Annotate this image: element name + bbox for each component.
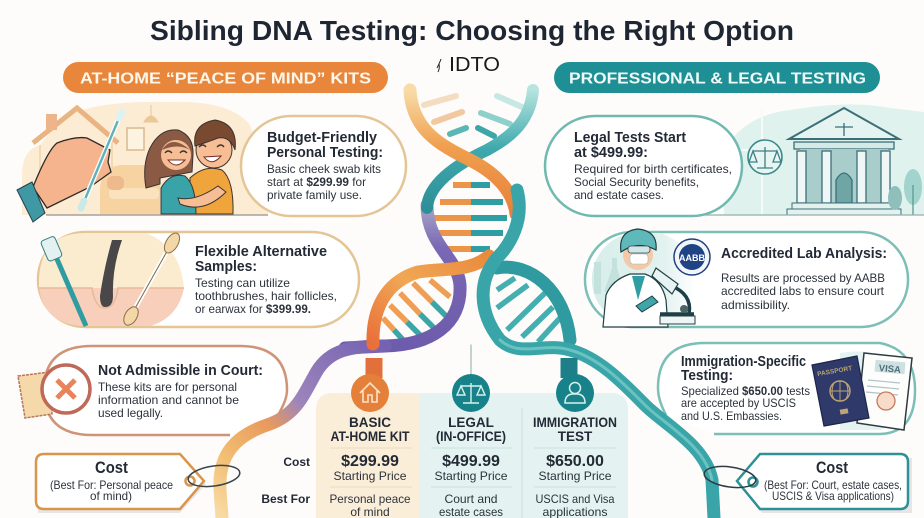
panel: accredited lab: accredited labs to ensure court xyxy=(721,284,885,298)
DNA helix xyxy=(220,90,714,518)
column: immigration xyxy=(533,374,617,518)
icon: AABB badge: AABB xyxy=(679,253,705,263)
column: immigration: Starting Price xyxy=(538,469,612,483)
panel: immigration: Specialized $650.00 tests xyxy=(681,384,810,398)
panel: flexible samples: Samples: xyxy=(195,258,257,275)
illustration: visa xyxy=(857,353,912,430)
panel: flexible samples: toothbrushes, hair follicles, xyxy=(195,289,337,303)
tag: cost right: USCIS & Visa applications) xyxy=(772,489,894,503)
column: immigration: $650.00 xyxy=(546,453,604,470)
panel: immigration: Immigration-Specific xyxy=(681,353,806,370)
heading: professional testing: PROFESSIONAL & LEGAL TESTING xyxy=(569,70,866,88)
tag: cost left: of mind) xyxy=(90,489,132,503)
floor xyxy=(46,214,268,216)
panel: legal tests: Social Security benefits, xyxy=(574,175,699,189)
sleeve xyxy=(17,182,45,222)
column: legal: Court and xyxy=(444,492,498,506)
panel: accredited lab: Results are processed by AABB xyxy=(721,271,885,285)
panel: budget-friendly: Personal Testing: xyxy=(267,144,383,161)
row labels: Cost xyxy=(283,455,310,469)
center rungs xyxy=(434,185,507,249)
icon: scales xyxy=(748,140,782,174)
strand: teal upper left xyxy=(427,90,533,208)
panel: legal tests: at $499.99: xyxy=(574,144,648,161)
panel: immigration: and U.S. Embassies. xyxy=(681,409,782,423)
illustration: visa: VISA xyxy=(878,363,901,376)
column: immigration: TEST xyxy=(558,429,593,444)
column: basic kit: AT-HOME KIT xyxy=(330,429,410,444)
illustration: passport xyxy=(812,356,869,426)
microscope xyxy=(652,268,695,324)
girl xyxy=(145,130,196,214)
boy xyxy=(190,120,235,214)
column: legal: (IN-OFFICE) xyxy=(436,429,506,444)
illustration: scientist xyxy=(592,229,695,327)
icon: rejected stamp xyxy=(18,365,90,418)
house roof xyxy=(33,108,118,143)
panel: flexible samples: or earwax for $399.99. xyxy=(195,302,311,316)
panel: budget-friendly: private family use. xyxy=(267,188,362,202)
row labels: Best For xyxy=(261,492,310,506)
panel: legal tests: Legal Tests Start xyxy=(574,129,686,146)
panel: budget-friendly: Basic cheek swab kits xyxy=(267,162,381,176)
column: legal: $499.99 xyxy=(442,453,500,470)
lower right rungs xyxy=(497,278,560,342)
panel: flexible samples: Flexible Alternative xyxy=(195,243,327,260)
panel: flexible samples: Testing can utilize xyxy=(195,276,290,290)
panel: budget-friendly xyxy=(241,116,406,216)
panel: budget-friendly: start at $299.99 for xyxy=(267,175,366,189)
column: legal xyxy=(431,374,512,518)
panel: flexible samples xyxy=(38,230,359,328)
panel: accredited lab xyxy=(585,229,908,327)
strand highlight xyxy=(500,340,712,480)
center drop line xyxy=(470,345,472,376)
illustration: courthouse xyxy=(700,104,924,215)
tag: cost right xyxy=(703,454,912,513)
illustration: home with family xyxy=(17,102,268,222)
panel: accredited lab: Accredited Lab Analysis: xyxy=(721,245,887,262)
title: Sibling DNA Testing: Choosing the Right Option xyxy=(150,15,794,46)
icon: AABB badge xyxy=(674,239,710,275)
panel: legal tests: Required for birth certificates, xyxy=(574,162,732,176)
connector stubs xyxy=(374,358,569,378)
column: basic kit xyxy=(330,374,412,518)
hand xyxy=(33,138,111,208)
strand: teal lower right xyxy=(497,267,570,340)
column: basic kit: Starting Price xyxy=(334,469,407,483)
swab xyxy=(81,112,122,208)
column: basic kit: Personal peace xyxy=(330,492,411,506)
tag: cost right: Cost xyxy=(816,458,848,477)
column: basic kit: BASIC xyxy=(349,415,391,430)
panel: not admissible: These kits are for personal xyxy=(98,380,237,394)
heading: at-home kits xyxy=(63,62,388,93)
column: immigration: IMMIGRATION xyxy=(533,415,617,430)
column: legal: LEGAL xyxy=(448,415,494,430)
strand: purple lower left xyxy=(345,205,460,348)
arms xyxy=(178,186,226,207)
upper rungs faded xyxy=(424,96,522,136)
logo: IDTO: IDTO xyxy=(449,53,500,76)
column: legal: Starting Price xyxy=(434,469,508,483)
heading: professional testing xyxy=(554,62,880,93)
strand: orange lower xyxy=(373,256,489,344)
column: immigration: USCIS and Visa xyxy=(536,492,615,506)
tag: cost left xyxy=(36,454,241,513)
panel: budget-friendly: Budget-Friendly xyxy=(267,129,378,146)
panel: immigration: are accepted by USCIS xyxy=(681,396,796,410)
heading: at-home kits: AT-HOME “PEACE OF MIND” KITS xyxy=(80,70,371,88)
panel: not admissible: information and cannot be xyxy=(98,393,239,407)
panel: immigration: Testing: xyxy=(681,367,733,384)
tag: cost left: (Best For: Personal peace xyxy=(50,478,173,492)
sofa xyxy=(100,165,160,214)
panel: immigration xyxy=(658,343,915,434)
strand: teal long xyxy=(483,190,714,518)
panel: not admissible: used legally. xyxy=(98,406,163,420)
tag: cost right: (Best For: Court, estate cases, xyxy=(764,478,902,492)
panel: accredited lab: admissibility. xyxy=(721,298,790,312)
illustration: samples xyxy=(38,230,184,328)
illustration: passport: PASSPORT xyxy=(817,365,853,378)
column: basic kit: $299.99 xyxy=(341,453,399,470)
panel: legal tests: and estate cases. xyxy=(574,188,664,202)
tag: cost left: Cost xyxy=(95,458,128,477)
row labels xyxy=(261,455,310,506)
lower left rungs xyxy=(383,280,450,342)
comparison table xyxy=(261,374,628,518)
panel: not admissible xyxy=(18,346,287,435)
panel: not admissible: Not Admissible in Court: xyxy=(98,362,263,379)
panel: legal tests xyxy=(545,116,742,216)
strand: orange upper xyxy=(410,90,516,214)
strand: purple to orange tail xyxy=(220,346,385,518)
